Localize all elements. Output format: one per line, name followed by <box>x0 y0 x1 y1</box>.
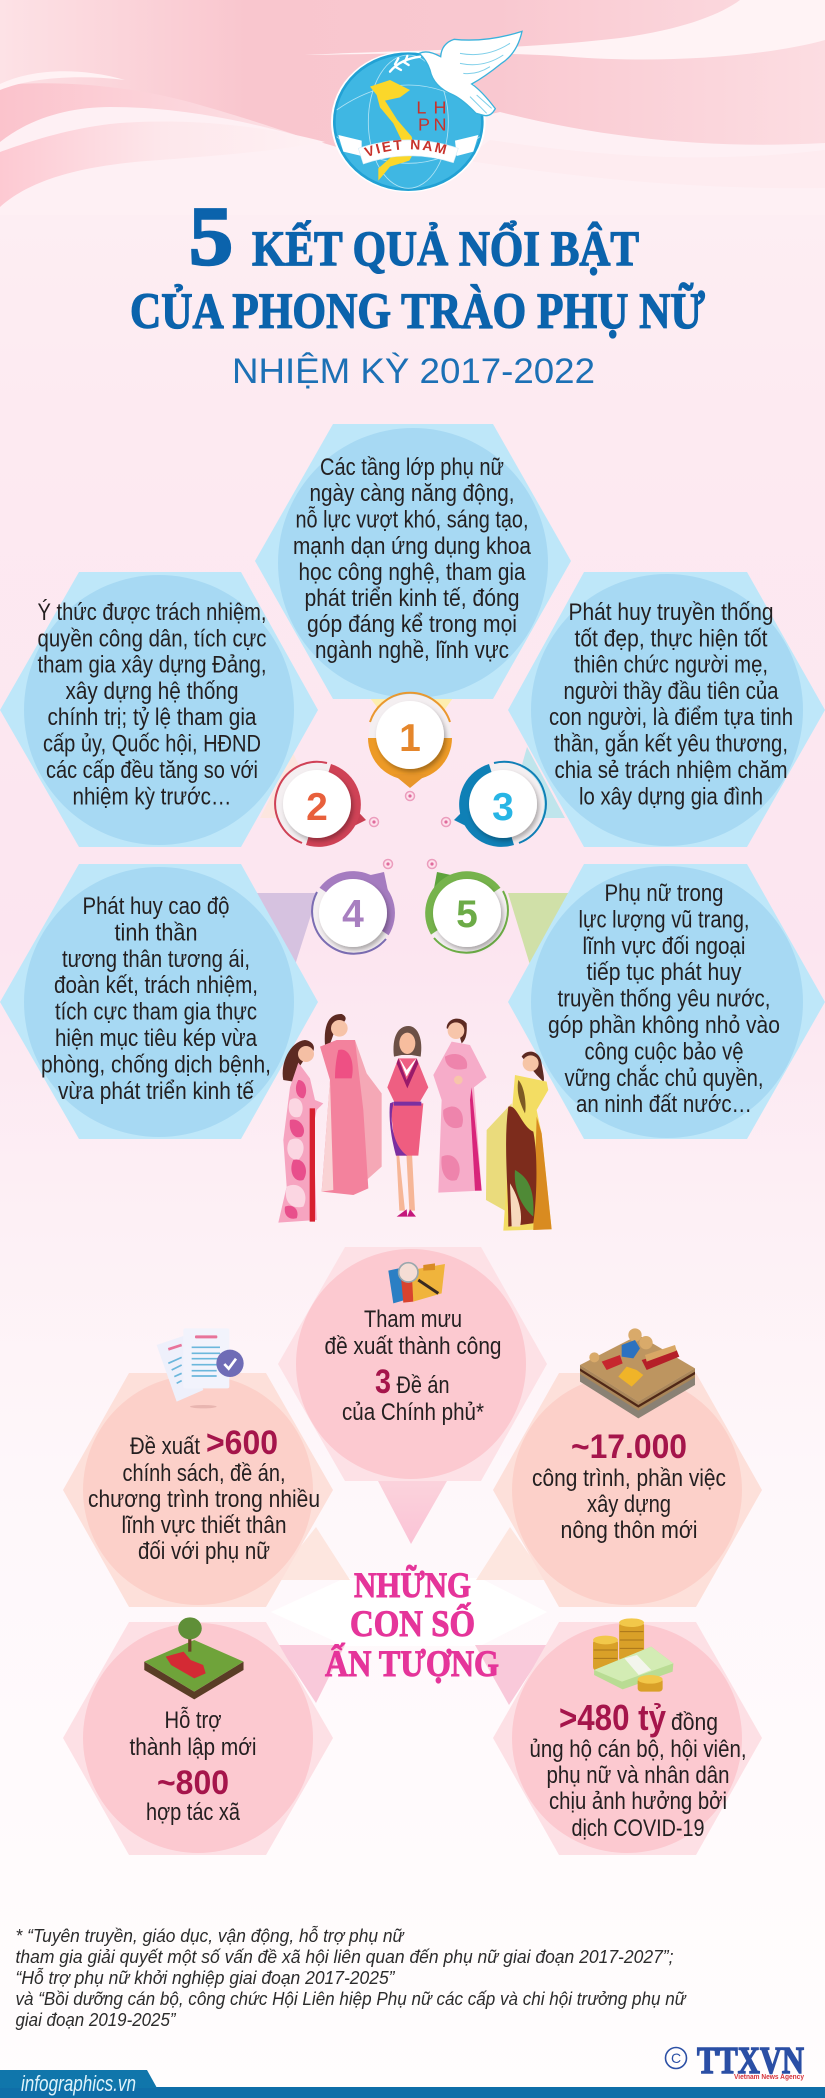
woman in yellow painted ao dai <box>486 1052 552 1231</box>
LHPN letters: H <box>433 97 446 117</box>
panel: stat 600 policies <box>63 1328 333 1607</box>
result 5 text: lực lượng vũ trang, <box>578 906 750 933</box>
stat text <box>532 1428 726 1544</box>
panel: stat 800 cooperatives <box>63 1617 333 1855</box>
woman in pink floral ao dai <box>278 1040 323 1223</box>
stat text: nông thôn mới <box>560 1517 698 1544</box>
footnote <box>16 1926 687 2030</box>
result 4 text: hiện mục tiêu kép vừa <box>55 1025 257 1052</box>
stat text: Đề án <box>396 1372 450 1399</box>
result 4 text: tương thân tương ái, <box>62 946 250 973</box>
woman in light pink ao dai <box>433 1019 487 1193</box>
stat text: ~800 <box>157 1764 229 1802</box>
result 2 text: cấp ủy, Quốc hội, HĐND <box>43 730 261 758</box>
panel: result 3 <box>508 572 825 847</box>
stat text: >600 <box>206 1424 278 1462</box>
stat text: chịu ảnh hưởng bởi <box>549 1788 727 1815</box>
stat text: 3 <box>375 1363 391 1401</box>
result 1 text: Các tầng lớp phụ nữ <box>320 454 504 481</box>
centre white hexagon background <box>271 1578 547 1646</box>
footnote: “Hỗ trợ phụ nữ khởi nghiệp giai đoạn 2017-2025” <box>16 1968 395 1988</box>
result 4 text: phòng, chống dịch bệnh, <box>41 1051 271 1078</box>
stat text: của Chính phủ* <box>342 1399 484 1426</box>
stat text: Hỗ trợ <box>164 1707 222 1734</box>
result 4 text <box>41 893 271 1105</box>
footnote: giai đoạn 2019-2025” <box>16 2010 176 2030</box>
result 1 text: mạnh dạn ứng dụng khoa <box>293 533 531 560</box>
stat text: ~17.000 <box>571 1428 687 1466</box>
logo: TTXVN: C <box>671 2050 681 2066</box>
result 5 text: Phụ nữ trong <box>604 880 724 907</box>
result 5 text: lĩnh vực đối ngoại <box>582 933 746 960</box>
LHPN letters: P <box>418 115 430 135</box>
result 4 text: vừa phát triển kinh tế <box>58 1078 254 1105</box>
badge 2: 2 <box>306 786 328 829</box>
panel: result 2 <box>0 572 318 847</box>
title: CỦA PHONG TRÀO PHỤ NỮ <box>130 282 705 340</box>
result 2 text <box>38 599 266 810</box>
result 1 text: nỗ lực vượt khó, sáng tạo, <box>296 506 528 534</box>
footnote: và “Bồi dưỡng cán bộ, công chức Hội Liên hiệp Phụ nữ các cấp và chi hội trưởng phụ nữ <box>16 1989 687 2009</box>
VIET NAM lettering: VIET NAM <box>364 140 447 156</box>
result 5 text: vững chắc chủ quyền, <box>564 1065 764 1092</box>
badge 3: 3 <box>492 786 514 829</box>
panel: result 4 <box>0 864 318 1139</box>
footnote: * “Tuyên truyền, giáo dục, vận động, hỗ trợ phụ nữ <box>16 1926 405 1946</box>
badge 5: 5 <box>456 893 478 936</box>
result 3 text: Phát huy truyền thống <box>568 599 774 626</box>
heading: impressive figures <box>325 1564 499 1685</box>
result 3 text <box>549 599 793 810</box>
woman in business suit <box>387 1026 428 1217</box>
result 5 text: an ninh đất nước… <box>576 1091 752 1118</box>
stat text: Đề xuất <box>130 1433 200 1460</box>
stat text <box>530 1697 746 1842</box>
icon: farm machinery plot <box>580 1328 695 1418</box>
result 4 text: Phát huy cao độ <box>82 893 230 920</box>
icon: garden plot with car <box>144 1617 244 1699</box>
illustration: five women <box>278 1014 552 1231</box>
stat text: chương trình trong nhiều <box>88 1486 320 1513</box>
stat text: hợp tác xã <box>146 1799 240 1826</box>
badge 3 <box>442 762 546 847</box>
result 5 text <box>548 880 780 1118</box>
stat text: thành lập mới <box>130 1734 256 1761</box>
panel: stat 17000 works <box>493 1328 762 1607</box>
woman in rose ao dai <box>320 1014 382 1195</box>
result 1 text: ngành nghề, lĩnh vực <box>315 637 509 664</box>
stat text <box>130 1707 256 1826</box>
coloured wedges behind badges <box>250 698 570 965</box>
panel: stat 480 billion <box>493 1618 762 1855</box>
result 3 text: người thầy đầu tiên của <box>564 678 779 705</box>
result 2 text: nhiệm kỳ trước… <box>72 784 232 810</box>
footer bar with site name: infographics.vn <box>21 2071 136 2096</box>
stat text: công trình, phần việc <box>532 1465 726 1492</box>
result 2 text: chính trị; tỷ lệ tham gia <box>48 704 257 731</box>
LHPN letters: N <box>433 115 446 135</box>
LHPN letters <box>416 97 446 135</box>
olive branch <box>390 56 420 72</box>
icon: coins and money <box>593 1618 673 1692</box>
result 4 text: đoàn kết, trách nhiệm, <box>54 972 258 999</box>
result 2 text: quyền công dân, tích cực <box>38 625 266 652</box>
logo: TTXVN: Vietnam News Agency <box>734 2074 804 2081</box>
result 4 text: tinh thần <box>114 919 198 946</box>
stat text: >480 tỷ <box>559 1697 666 1738</box>
badge 5 <box>425 860 508 954</box>
badge 2 <box>275 762 378 847</box>
stat text <box>324 1306 502 1426</box>
title: KẾT QUẢ NỔI BẬT <box>252 219 639 276</box>
title: 5 <box>189 190 233 283</box>
result 5 text: công cuộc bảo vệ <box>584 1038 744 1065</box>
result 4 text: tích cực tham gia thực <box>55 999 257 1026</box>
stat text <box>88 1424 320 1565</box>
stat text: xây dựng <box>587 1491 671 1518</box>
icon: documents with check badge <box>157 1328 244 1408</box>
result 5 text: truyền thống yêu nước, <box>558 986 770 1013</box>
result 3 text: tốt đẹp, thực hiện tốt <box>574 625 768 652</box>
result 2 text: Ý thức được trách nhiệm, <box>38 599 266 626</box>
result 5 text: tiếp tục phát huy <box>586 959 742 986</box>
LHPN letters: L <box>416 97 426 117</box>
heading: impressive figures: CON SỐ <box>350 1601 475 1645</box>
badge 4: 4 <box>342 893 364 936</box>
stat text: đồng <box>671 1709 718 1736</box>
header swoosh background <box>0 0 825 215</box>
result 2 text: xây dựng hệ thống <box>66 678 238 705</box>
result 1 text: học công nghệ, tham gia <box>298 559 526 586</box>
stat text: Tham mưu <box>364 1306 462 1333</box>
footnote: tham gia giải quyết một số vấn đề xã hội liên quan đến phụ nữ giai đoạn 2017-2027”; <box>16 1947 674 1967</box>
stat text: đề xuất thành công <box>324 1333 502 1360</box>
stat text: ủng hộ cán bộ, hội viên, <box>530 1736 746 1763</box>
title <box>130 190 705 340</box>
map of Vietnam <box>370 80 415 181</box>
stat text: chính sách, đề án, <box>122 1460 286 1487</box>
result 3 text: thiên chức người mẹ, <box>574 652 768 679</box>
panel: stat 3 proposals <box>278 1247 547 1481</box>
badge 4 <box>312 860 395 954</box>
panel: result 5 <box>508 864 825 1139</box>
footer bar with site name <box>0 2070 825 2098</box>
subtitle: NHIỆM KỲ 2017-2022 <box>232 352 595 391</box>
panel: result 1 <box>255 424 571 699</box>
result 1 text: góp đáng kể trong mọi <box>307 611 517 638</box>
stat text: lĩnh vực thiết thân <box>122 1512 286 1539</box>
icon: books and magnifier <box>388 1263 445 1303</box>
ribbon <box>338 135 478 156</box>
result 2 text: các cấp đều tăng so với <box>46 757 258 784</box>
stat text: phụ nữ và nhân dân <box>546 1762 730 1789</box>
badge 1: 1 <box>399 717 421 760</box>
badge 1 <box>368 693 452 800</box>
result 2 text: tham gia xây dựng Đảng, <box>38 652 266 679</box>
heading: impressive figures: ẤN TƯỢNG <box>325 1642 499 1685</box>
result 3 text: lo xây dựng gia đình <box>579 784 763 810</box>
connecting wedges <box>274 1481 548 1705</box>
heading: impressive figures: NHỮNG <box>354 1564 471 1605</box>
dove <box>419 31 522 116</box>
result 5 text: góp phần không nhỏ vào <box>548 1012 780 1039</box>
stat text: đối với phụ nữ <box>138 1538 270 1565</box>
logo: Vietnam Women's Union <box>331 30 523 192</box>
result 1 text: ngày càng năng động, <box>310 480 514 507</box>
result 1 text <box>293 454 531 664</box>
logo: TTXVN <box>666 2040 804 2082</box>
stat text: dịch COVID-19 <box>572 1815 704 1842</box>
result 1 text: phát triển kinh tế, đóng <box>304 585 520 612</box>
